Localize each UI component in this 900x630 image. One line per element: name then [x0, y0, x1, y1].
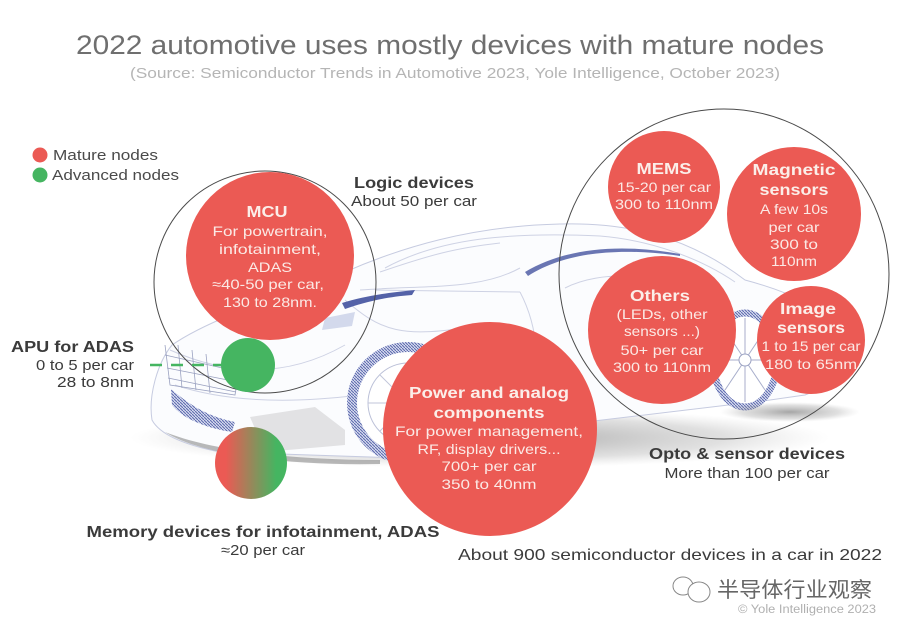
- bubble: MCU: ADAS: [248, 259, 292, 275]
- front grille: [165, 345, 240, 395]
- bubble: power and analog: Power and analog: [409, 385, 569, 402]
- bubble: MCU: MCU: [246, 204, 288, 221]
- bubble: others: [588, 256, 736, 404]
- bubble: magnetic sensors: 110nm: [771, 253, 817, 269]
- bubble: MEMS: 15-20 per car: [617, 179, 711, 195]
- bubble: MEMS: [608, 131, 720, 243]
- bubble: others: (LEDs, other: [616, 306, 708, 322]
- opto and sensor label: Opto & sensor devices: [649, 446, 845, 463]
- logic devices label: About 50 per car: [351, 194, 477, 210]
- APU label: APU for ADAS: [11, 339, 134, 356]
- copyright: © Yole Intelligence 2023: [738, 604, 876, 616]
- bubble: magnetic sensors: sensors: [760, 182, 829, 199]
- title: 2022 automotive uses mostly devices with mature nodes: [76, 30, 824, 60]
- bubble: others: 300 to 110nm: [613, 359, 711, 375]
- bubble: MEMS: MEMS: [636, 161, 692, 178]
- bubble: others: Others: [630, 288, 690, 305]
- bubble: APU: [221, 338, 275, 392]
- bubble: memory devices: [215, 427, 287, 499]
- opto and sensor label: [649, 446, 845, 482]
- legend: Advanced nodes: [52, 168, 179, 184]
- bubble: magnetic sensors: A few 10s: [760, 201, 828, 217]
- legend: [32, 148, 179, 184]
- bubble: MCU: For powertrain,: [212, 223, 328, 239]
- memory label: [86, 524, 440, 559]
- bubble: image sensors: [757, 286, 865, 394]
- memory label: ≈20 per car: [221, 543, 305, 559]
- bubble: MCU: infotainment,: [219, 241, 321, 257]
- bubble: MCU: 130 to 28nm.: [223, 294, 317, 310]
- bubble: MCU: [186, 172, 354, 340]
- memory label: Memory devices for infotainment, ADAS: [86, 524, 440, 541]
- source line: (Source: Semiconductor Trends in Automotive 2023, Yole Intelligence, October 2023): [130, 65, 780, 82]
- bubble: MCU: ≈40-50 per car,: [212, 276, 324, 292]
- opto and sensor label: More than 100 per car: [664, 466, 830, 482]
- rear wheel: [713, 313, 777, 407]
- bubble: image sensors: 180 to 65nm: [765, 356, 857, 372]
- total devices caption: About 900 semiconductor devices in a car in 2022: [458, 547, 882, 564]
- bubble: MEMS: 300 to 110nm: [615, 196, 713, 212]
- opto and sensor group circle: [559, 109, 889, 439]
- bubble: power and analog: [383, 322, 597, 536]
- front wheel: [352, 347, 464, 459]
- logic devices label: Logic devices: [354, 175, 474, 192]
- APU label: 0 to 5 per car: [36, 358, 134, 374]
- car illustration: [130, 224, 860, 468]
- logic devices group circle: [154, 171, 376, 393]
- APU label: 28 to 8nm: [57, 375, 134, 391]
- APU dashed connector: [150, 364, 222, 366]
- bubble: power and analog: components: [434, 405, 545, 422]
- watermark text: 半导体行业观察: [717, 574, 872, 604]
- bubble: magnetic sensors: 300 to: [770, 236, 818, 252]
- bubble: image sensors: sensors: [777, 320, 845, 337]
- bubble: power and analog: RF, display drivers...: [418, 441, 560, 457]
- bubble: magnetic sensors: per car: [768, 219, 820, 235]
- bubble: power and analog: 700+ per car: [442, 458, 537, 474]
- bubble: magnetic sensors: [727, 147, 861, 281]
- bubble: power and analog: For power management,: [395, 423, 583, 439]
- APU label: [11, 339, 134, 391]
- logic devices label: [351, 175, 477, 210]
- bubble: others: sensors ...): [624, 323, 700, 339]
- bubble: magnetic sensors: Magnetic: [752, 162, 836, 179]
- lower intake: [171, 389, 235, 432]
- bubble: power and analog: 350 to 40nm: [442, 476, 536, 492]
- bubble: others: 50+ per car: [620, 342, 704, 358]
- legend: Mature nodes: [53, 148, 158, 164]
- bubble: image sensors: 1 to 15 per car: [762, 338, 861, 354]
- bubble: image sensors: Image: [780, 301, 836, 318]
- watermark icon: chat bubbles: [673, 577, 710, 602]
